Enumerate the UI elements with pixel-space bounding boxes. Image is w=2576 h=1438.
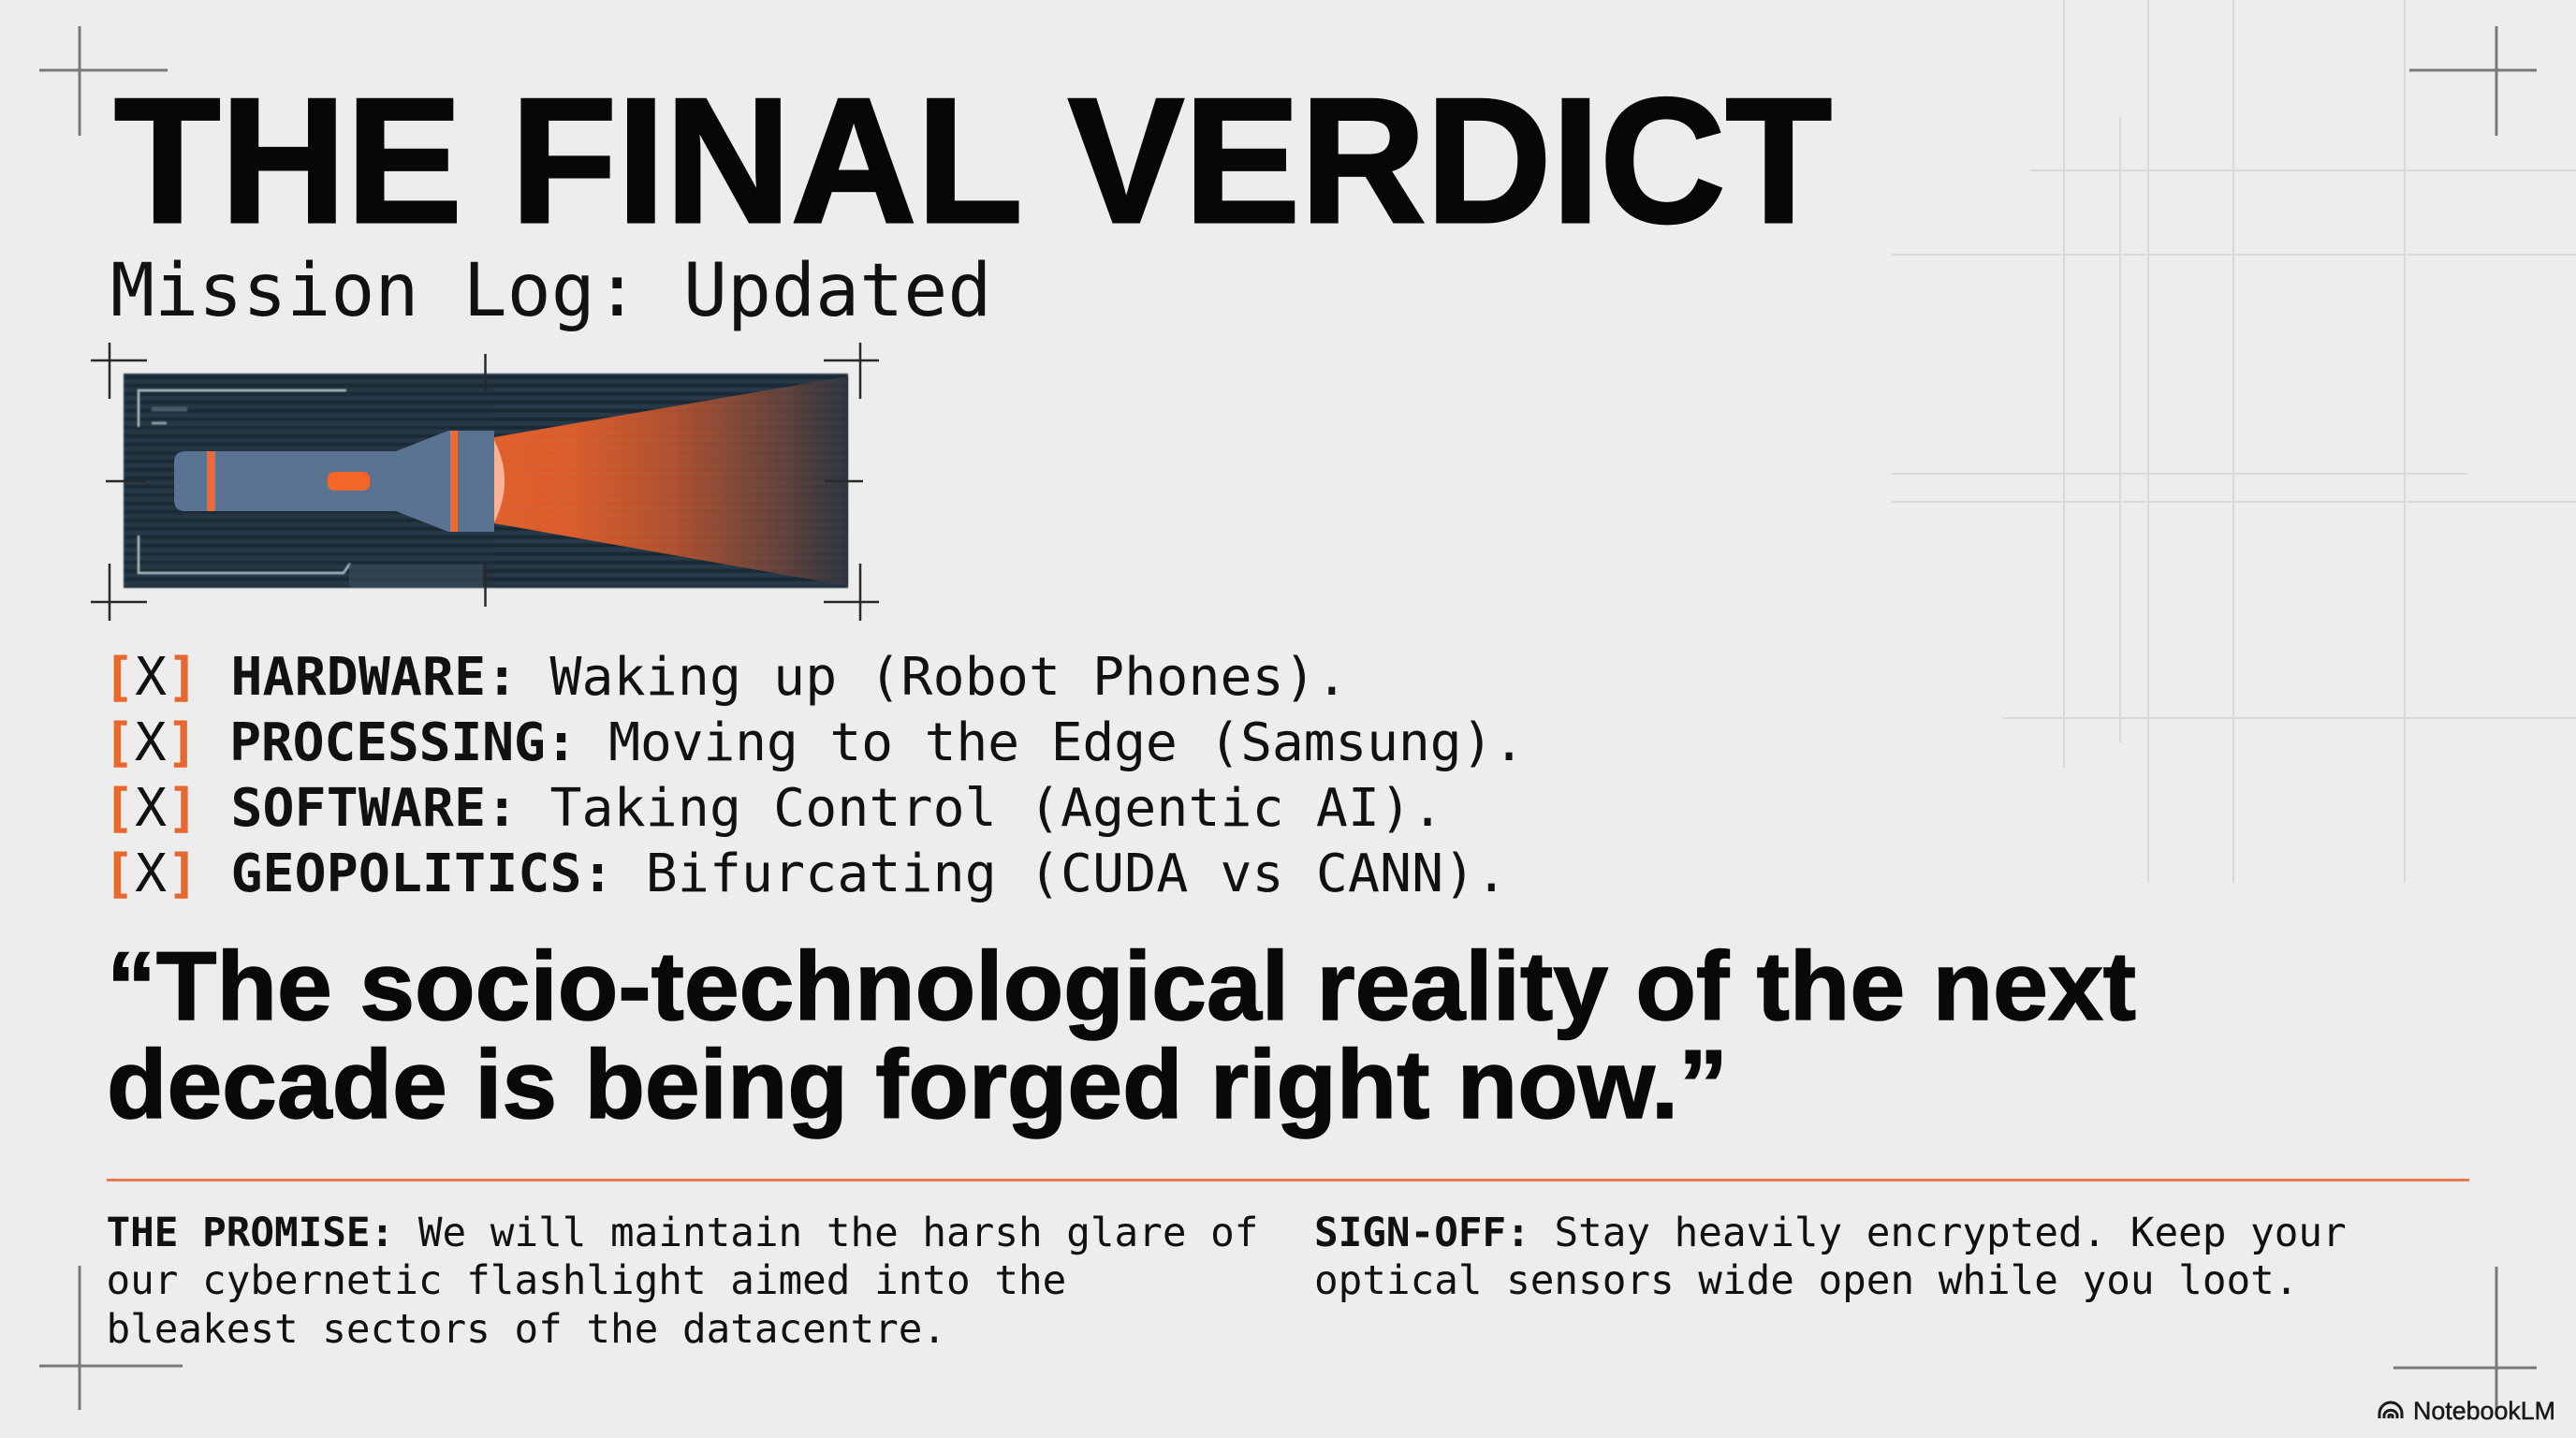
panel background [124, 374, 848, 588]
crop mark: bottom right [2393, 1267, 2537, 1409]
crop mark: top right [2409, 26, 2537, 136]
body [174, 431, 494, 532]
text block: the promise: our cybernetic flashlight aimed into the [107, 1257, 1066, 1304]
text block: the promise: THE PROMISE: We will maintain the harsh glare of [107, 1210, 1258, 1256]
subtitle: Mission Log: Updated [110, 248, 991, 333]
panel: flashlight illustration [91, 343, 879, 621]
light beam [494, 376, 848, 586]
registration marks [91, 343, 879, 621]
HUD brackets [139, 390, 831, 573]
quote: decade is being forged right now.” [107, 1031, 1728, 1139]
checklist row: software: [X] SOFTWARE: Taking Control (Agentic AI). [103, 778, 1443, 839]
HUD bar [349, 565, 483, 587]
title: THE FINAL VERDICT [114, 62, 1832, 260]
text block: the promise: bleakest sectors of the datacentre. [107, 1306, 946, 1353]
checklist [103, 647, 1525, 904]
text block: sign-off [1314, 1210, 2347, 1304]
lens [494, 440, 505, 522]
icon: notebook arcs [2379, 1402, 2402, 1418]
text block: sign-off: SIGN-OFF: Stay heavily encrypted. Keep your [1314, 1210, 2347, 1256]
checklist row: processing: [X] PROCESSING: Moving to the Edge (Samsung). [103, 712, 1525, 773]
checklist row: geopolitics: [X] GEOPOLITICS: Bifurcating (CUDA vs CANN). [103, 844, 1507, 904]
text block: sign-off: optical sensors wide open while you loot. [1314, 1257, 2298, 1304]
switch [328, 472, 370, 491]
NotebookLM logo: NotebookLM [2413, 1397, 2555, 1425]
text block: the promise [107, 1210, 1258, 1353]
quote [107, 932, 2136, 1139]
orange bands [207, 451, 215, 511]
flashlight [174, 431, 505, 532]
crop mark: top left [39, 26, 168, 136]
orange divider [107, 1179, 2469, 1181]
quote: “The socio-technological reality of the next [107, 932, 2136, 1041]
checklist row: hardware: [X] HARDWARE: Waking up (Robot Phones). [103, 647, 1348, 708]
crop mark: bottom left [39, 1266, 183, 1410]
